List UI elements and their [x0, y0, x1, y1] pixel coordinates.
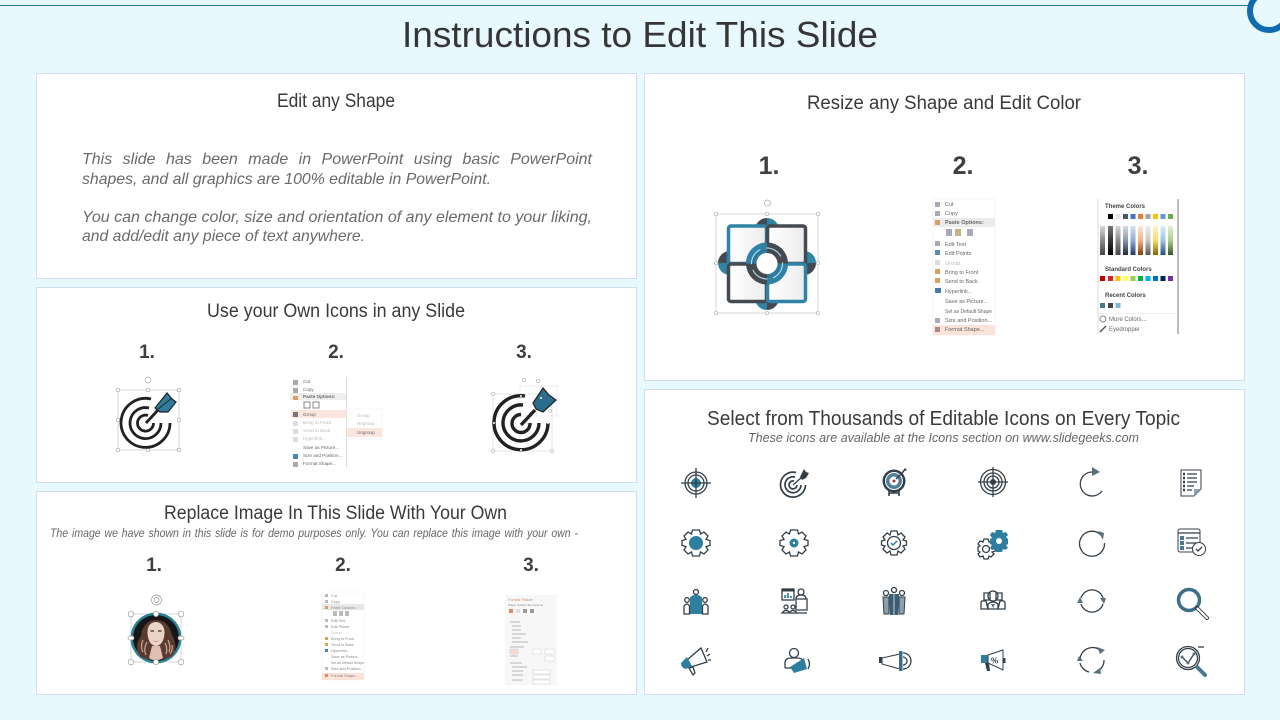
icon: gear solid centre — [682, 530, 710, 556]
panel: edit any shape — [36, 74, 636, 278]
step numbers — [759, 152, 1148, 180]
context menu: group: Format Shape... — [303, 461, 336, 466]
context menu: format shape: Size and Position... — [331, 667, 364, 671]
context menu: shape options: Set as Default Shape — [945, 309, 992, 315]
context menu: shape options: Edit Text — [945, 242, 966, 248]
icon: presentation audience — [782, 589, 807, 613]
context menu: group: Size and Position... — [303, 453, 342, 458]
heading: editable icons: Select from Thousands of Editable Icons on Every Topic — [707, 408, 1180, 430]
icon: arc arrow — [1080, 531, 1105, 556]
icon: team presenter — [684, 590, 708, 614]
icon: business team — [883, 588, 905, 615]
context menu: shape options: Paste Options: — [945, 220, 984, 226]
subtitle: icons source: These icons are available at the Icons section on www.slidegeeks.com — [748, 431, 1139, 445]
icon: single arrow arc — [1080, 467, 1102, 496]
icon: megaphone — [681, 648, 711, 675]
step numbers: 2. — [953, 152, 973, 180]
panel: replace image — [36, 492, 636, 694]
step numbers: 3. — [516, 342, 532, 363]
icon: checklist window — [1178, 529, 1206, 556]
step numbers — [146, 555, 539, 576]
icon: person with megaphone — [785, 648, 810, 673]
context menu: shape options: Cut — [945, 202, 954, 208]
icon: target ungrouped — [492, 378, 557, 452]
context menu: shape options — [933, 199, 995, 335]
context menu: group: Save as Picture... — [303, 445, 339, 450]
context menu: format shape: Cut — [331, 594, 338, 598]
icon: two gears — [978, 530, 1008, 559]
icon: loudspeaker — [879, 651, 911, 671]
step numbers: 2. — [335, 555, 351, 576]
icon: analytics magnifier — [1176, 646, 1205, 675]
color picker: Theme Colors — [1105, 204, 1146, 210]
icon: three arrow cycle — [1077, 647, 1105, 674]
body text: and add/edit any piece of text anywhere. — [82, 228, 365, 245]
context menu: shape options: Send to Back — [945, 279, 978, 285]
step numbers: 1. — [759, 152, 779, 180]
title: Instructions to Edit This Slide — [402, 14, 878, 55]
context menu: shape options: Edit Points — [945, 251, 972, 257]
heading: resize shape: Resize any Shape and Edit Color — [807, 93, 1082, 114]
context menu: group: Cut — [303, 379, 311, 384]
heading: edit any shape: Edit any Shape — [277, 91, 395, 112]
context menu: format shape: Edit Text — [331, 619, 346, 623]
icon: bullseye crosshair — [978, 467, 1008, 497]
heading: own icons: Use your Own Icons in any Slide — [207, 301, 465, 322]
context menu: format shape: Copy — [331, 600, 340, 604]
icon: gear with check — [882, 531, 906, 555]
icon: crosshair target — [681, 468, 711, 498]
context menu: shape options: Copy — [945, 211, 958, 217]
format picture pane — [505, 595, 557, 685]
image: portrait with selection handles — [128, 595, 184, 665]
step numbers: 3. — [523, 555, 539, 576]
panel: use your own icons — [36, 288, 636, 482]
icon: magnifier — [1178, 590, 1207, 618]
color picker: Eyedropper — [1109, 327, 1140, 333]
color picker: More Colors... — [1109, 317, 1147, 323]
icon: gear with ring — [780, 530, 808, 556]
icon: leadership team — [981, 591, 1005, 609]
icon: discount megaphone — [981, 650, 1006, 671]
context menu: format shape: Group — [331, 631, 342, 635]
context menu: group: Group — [303, 412, 316, 417]
icon: archery target — [882, 468, 907, 496]
context menu: shape options: Format Shape... — [945, 327, 985, 333]
context menu: group: Hyperlink... — [303, 436, 326, 441]
context menu: format shape: Bring to Front — [331, 637, 355, 641]
body text: This slide has been made in PowerPoint using basic PowerPoint — [82, 151, 593, 168]
step numbers: 3. — [1128, 152, 1148, 180]
panel: editable icons — [644, 390, 1244, 694]
context menu: shape options: Save as Picture... — [945, 299, 989, 305]
context menu: group: Paste Options: — [303, 394, 336, 399]
format picture pane: Shape Options Text Options — [508, 603, 543, 607]
context menu: format shape: Paste Options: — [331, 606, 356, 610]
context menu: shape options: Size and Position... — [945, 318, 993, 324]
context menu: format shape: Send to Back — [331, 643, 354, 647]
icon: target with selection box — [116, 377, 181, 452]
body text: You can change color, size and orientation of any element to your liking, — [82, 209, 592, 226]
color picker: Recent Colors — [1105, 293, 1146, 299]
context menu: format shape — [322, 592, 364, 680]
corner ring decoration — [1250, 0, 1280, 30]
step numbers: 1. — [139, 342, 155, 363]
subtitle: replace image: The image we have shown in this slide is for demo purposes only. You can replace this image with your own - — [50, 528, 578, 540]
context menu: group: Bring to Front — [303, 420, 332, 425]
context menu: format shape: Format Shape... — [331, 674, 358, 678]
icon: checklist document — [1181, 470, 1201, 496]
step numbers: 2. — [328, 342, 344, 363]
context menu: format shape: Set as Default Shape — [331, 661, 364, 665]
color picker — [1098, 199, 1179, 334]
step numbers — [139, 342, 532, 363]
body text — [82, 151, 593, 245]
format picture pane: Format Picture — [508, 598, 533, 602]
context menu: group: Group — [357, 413, 370, 418]
context menu: group: Regroup — [357, 421, 375, 426]
context menu: format shape: Edit Points — [331, 625, 349, 629]
context menu: group: Send to Back — [303, 428, 331, 433]
icon: discount megaphone: % — [991, 656, 998, 666]
step numbers: 1. — [146, 555, 162, 576]
context menu: shape options: Hyperlink... — [945, 289, 973, 295]
diagram: four square shape — [714, 200, 820, 315]
panel: resize any shape — [644, 74, 1244, 380]
context menu: shape options: Group — [945, 261, 960, 267]
heading: replace image: Replace Image In This Slide With Your Own — [164, 503, 507, 524]
context menu: format shape: Save as Picture... — [331, 655, 361, 659]
context menu: shape options: Bring to Front — [945, 270, 979, 276]
context menu: group: Ungroup — [357, 430, 375, 435]
body text: shapes, and all graphics are 100% editable in PowerPoint. — [82, 171, 491, 188]
context menu: group: Copy — [303, 387, 314, 392]
color picker: Standard Colors — [1105, 267, 1152, 273]
context menu: group — [290, 377, 382, 468]
icon: two arrow cycle — [1077, 590, 1106, 612]
icon: dart target — [781, 469, 809, 497]
context menu: format shape: Hyperlink... — [331, 649, 350, 653]
